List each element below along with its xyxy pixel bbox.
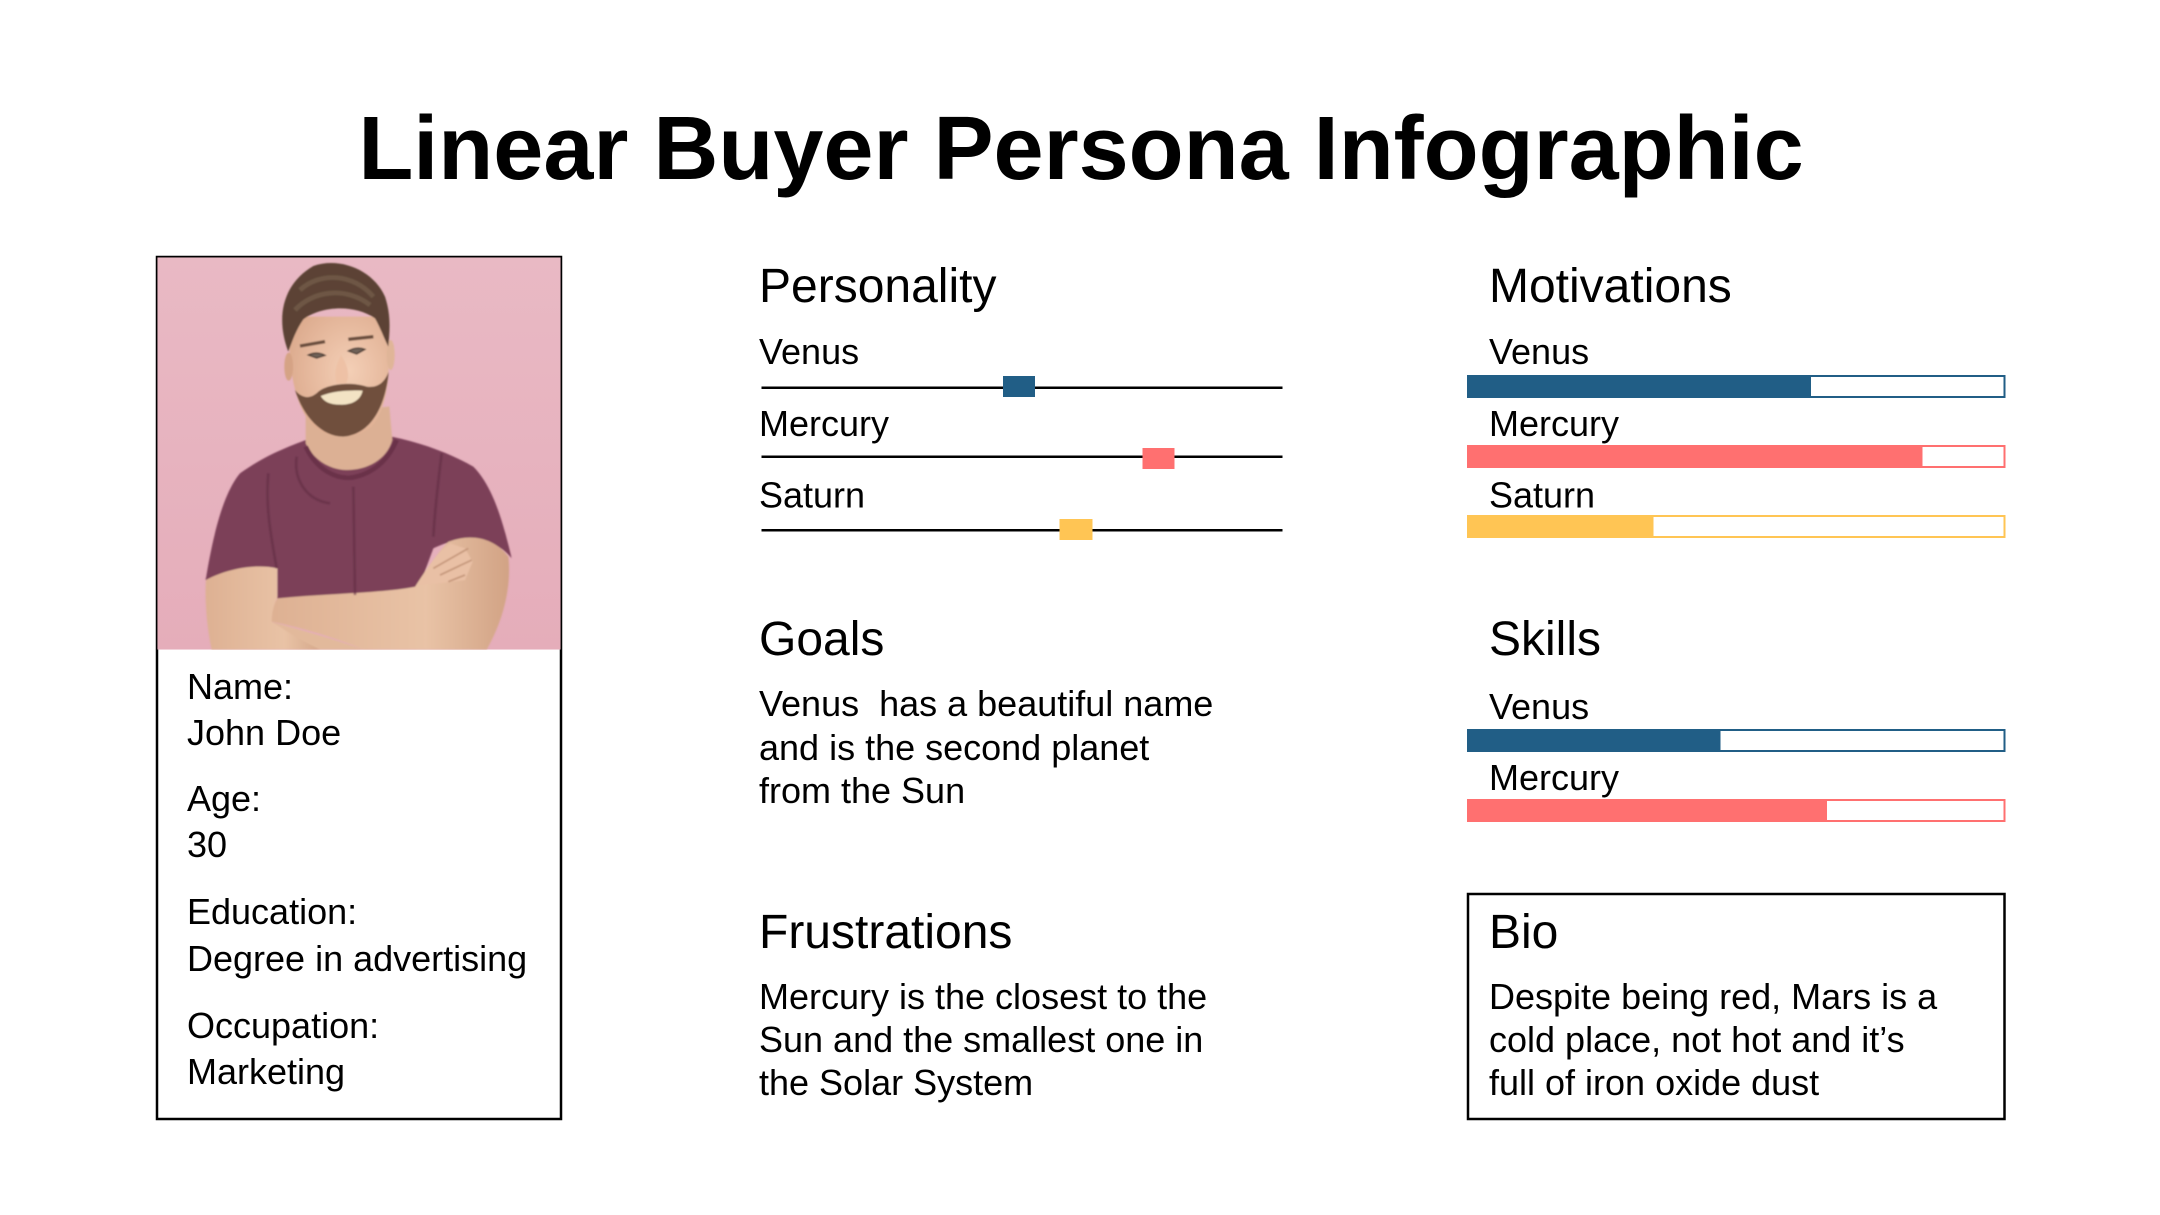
text: goals body: Venus has a beautiful name: [759, 683, 1213, 724]
slider: venus: [759, 331, 1282, 397]
heading: motivations: Motivations: [1489, 260, 1732, 313]
bar: mercury: Mercury: [1489, 403, 1619, 444]
slider: mercury: Mercury: [759, 403, 889, 444]
panel: personality: [759, 260, 1282, 540]
text: occupation: Occupation:: [187, 1005, 379, 1046]
text: age: [187, 778, 261, 865]
text: name: [187, 666, 341, 753]
text: name: John Doe: [187, 712, 341, 753]
text: education: Education:: [187, 891, 357, 932]
bar: venus: Venus: [1489, 686, 1589, 727]
bar: mercury: Mercury: [1489, 757, 1619, 798]
text: goals body: from the Sun: [759, 770, 965, 811]
text: education: [187, 891, 527, 979]
bar: saturn: [1467, 474, 2004, 538]
text: goals body: [759, 683, 1213, 811]
bar: venus: [1467, 686, 2004, 752]
heading: goals: Goals: [759, 613, 884, 666]
text: age: 30: [187, 824, 227, 865]
panel: bio: [1468, 894, 2004, 1119]
text: frustrations body: [759, 976, 1207, 1103]
heading: frustrations: Frustrations: [759, 906, 1012, 959]
text: bio body: cold place, not hot and it’s: [1489, 1019, 1905, 1060]
heading: bio: Bio: [1489, 906, 1558, 959]
panel: frustrations: [759, 906, 1207, 1103]
heading: personality: Personality: [759, 260, 996, 313]
heading: skills: Skills: [1489, 613, 1601, 666]
slider: mercury: [759, 403, 1282, 469]
text: name: Name:: [187, 666, 293, 707]
bar: venus: [1467, 331, 2004, 398]
panel: skills: [1467, 613, 2004, 822]
slider: saturn: [759, 474, 1282, 540]
bar: saturn: Saturn: [1489, 474, 1595, 516]
text: bio body: full of iron oxide dust: [1489, 1062, 1819, 1103]
panel: motivations: [1467, 260, 2004, 538]
title: Linear Buyer Persona Infographic: [358, 99, 1804, 199]
text: bio body: Despite being red, Mars is a: [1489, 976, 1938, 1017]
bar: mercury: [1467, 757, 2004, 822]
text: age: Age:: [187, 778, 261, 819]
bar: mercury: [1467, 403, 2004, 468]
text: frustrations body: Sun and the smallest one in: [759, 1019, 1203, 1060]
slider: saturn: Saturn: [759, 474, 865, 516]
text: bio body: [1489, 976, 1938, 1103]
slider: venus: Venus: [759, 331, 859, 372]
text: goals body: and is the second planet: [759, 727, 1149, 768]
text: occupation: [187, 1005, 379, 1092]
text: occupation: Marketing: [187, 1051, 345, 1092]
text: frustrations body: Mercury is the closest to the: [759, 976, 1207, 1017]
bar: venus: Venus: [1489, 331, 1589, 372]
photo: smiling man with crossed arms: [157, 257, 561, 650]
panel: goals: [759, 613, 1213, 811]
panel: profile card: [157, 257, 561, 1119]
text: frustrations body: the Solar System: [759, 1062, 1033, 1103]
text: education: Degree in advertising: [187, 938, 527, 979]
